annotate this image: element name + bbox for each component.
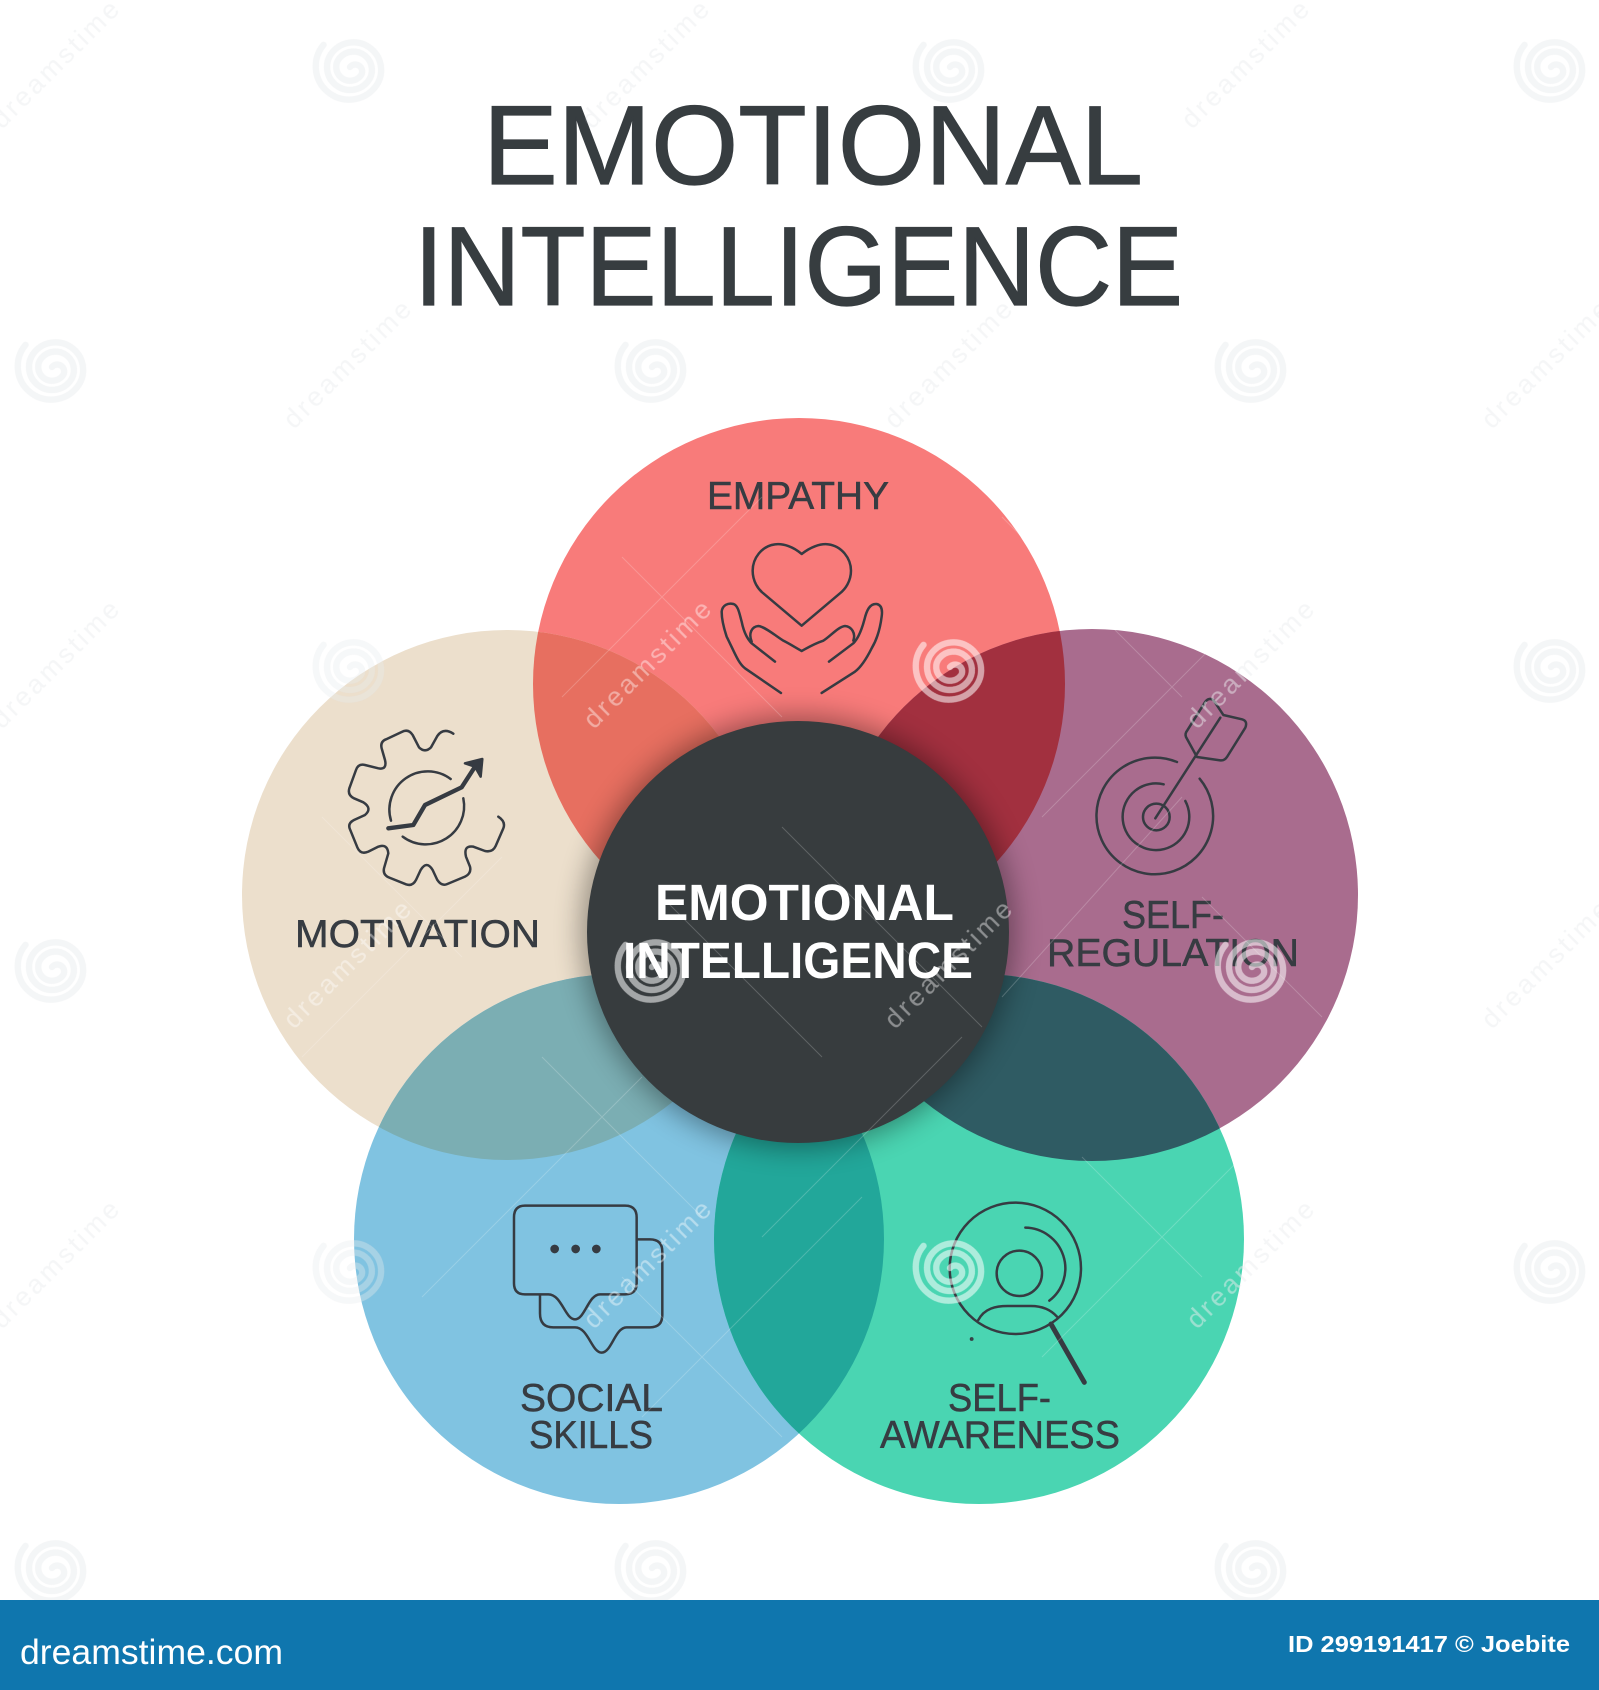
overlap: self-regulation and self-awareness <box>924 975 1220 1161</box>
icon: speech bubbles <box>514 1206 662 1353</box>
icon: magnifier with person <box>950 1203 1084 1382</box>
label: self-awareness: SELF- <box>948 1377 1051 1420</box>
label: self-awareness <box>880 1377 1120 1457</box>
label: self-regulation: REGULATION <box>1047 932 1299 975</box>
center label: INTELLIGENCE <box>623 932 973 989</box>
icon: gear with rising arrow <box>349 731 504 885</box>
label: self-regulation: SELF- <box>1122 894 1224 937</box>
footer image id: ID 299191417 © Joebite <box>1288 1631 1570 1657</box>
label: social skills <box>520 1377 663 1457</box>
watermark: dreamstime <box>577 1192 719 1334</box>
label: self-awareness: AWARENESS <box>880 1414 1120 1457</box>
label: social skills: SOCIAL <box>520 1377 663 1420</box>
watermark: dreamstime <box>1180 1192 1322 1334</box>
title: INTELLIGENCE <box>414 204 1183 329</box>
icon: target with arrow <box>1096 699 1246 874</box>
icon: heart in hands <box>722 544 882 693</box>
watermark: dreamstime <box>878 892 1020 1034</box>
overlap: social skills and self-awareness <box>714 1133 884 1434</box>
footer logo text: dreamstime.com <box>20 1633 283 1672</box>
label: motivation: MOTIVATION <box>295 913 540 956</box>
center circle <box>587 721 1009 1143</box>
overlap: empathy and self-regulation <box>878 631 1065 862</box>
watermark: dreamstime <box>878 292 1020 434</box>
title: EMOTIONAL <box>483 83 1143 208</box>
venn diagram circles <box>242 418 1358 1504</box>
circle: self-awareness <box>714 974 1244 1504</box>
circle: motivation <box>242 630 772 1160</box>
center label <box>623 874 973 989</box>
circle: empathy <box>533 418 1065 950</box>
overlap: motivation and social skills <box>379 976 672 1160</box>
center circle shadow <box>582 716 1014 1148</box>
circle: self-regulation <box>826 629 1358 1161</box>
circle: social skills <box>354 974 884 1504</box>
watermark: dreamstime <box>1180 592 1322 734</box>
overlap: empathy and motivation <box>533 632 719 860</box>
title <box>414 83 1183 329</box>
label: empathy: EMPATHY <box>707 475 889 518</box>
watermark: dreamstime <box>577 592 719 734</box>
footer bar <box>0 1600 1599 1690</box>
watermark: dreamstime <box>1180 592 1322 734</box>
watermark: dreamstime <box>277 892 419 1034</box>
label: self-regulation <box>1047 894 1299 975</box>
label: social skills: SKILLS <box>529 1414 653 1457</box>
watermark: dreamstime <box>1180 1192 1322 1334</box>
watermark: dreamstime <box>277 292 419 434</box>
center label: EMOTIONAL <box>655 874 954 931</box>
